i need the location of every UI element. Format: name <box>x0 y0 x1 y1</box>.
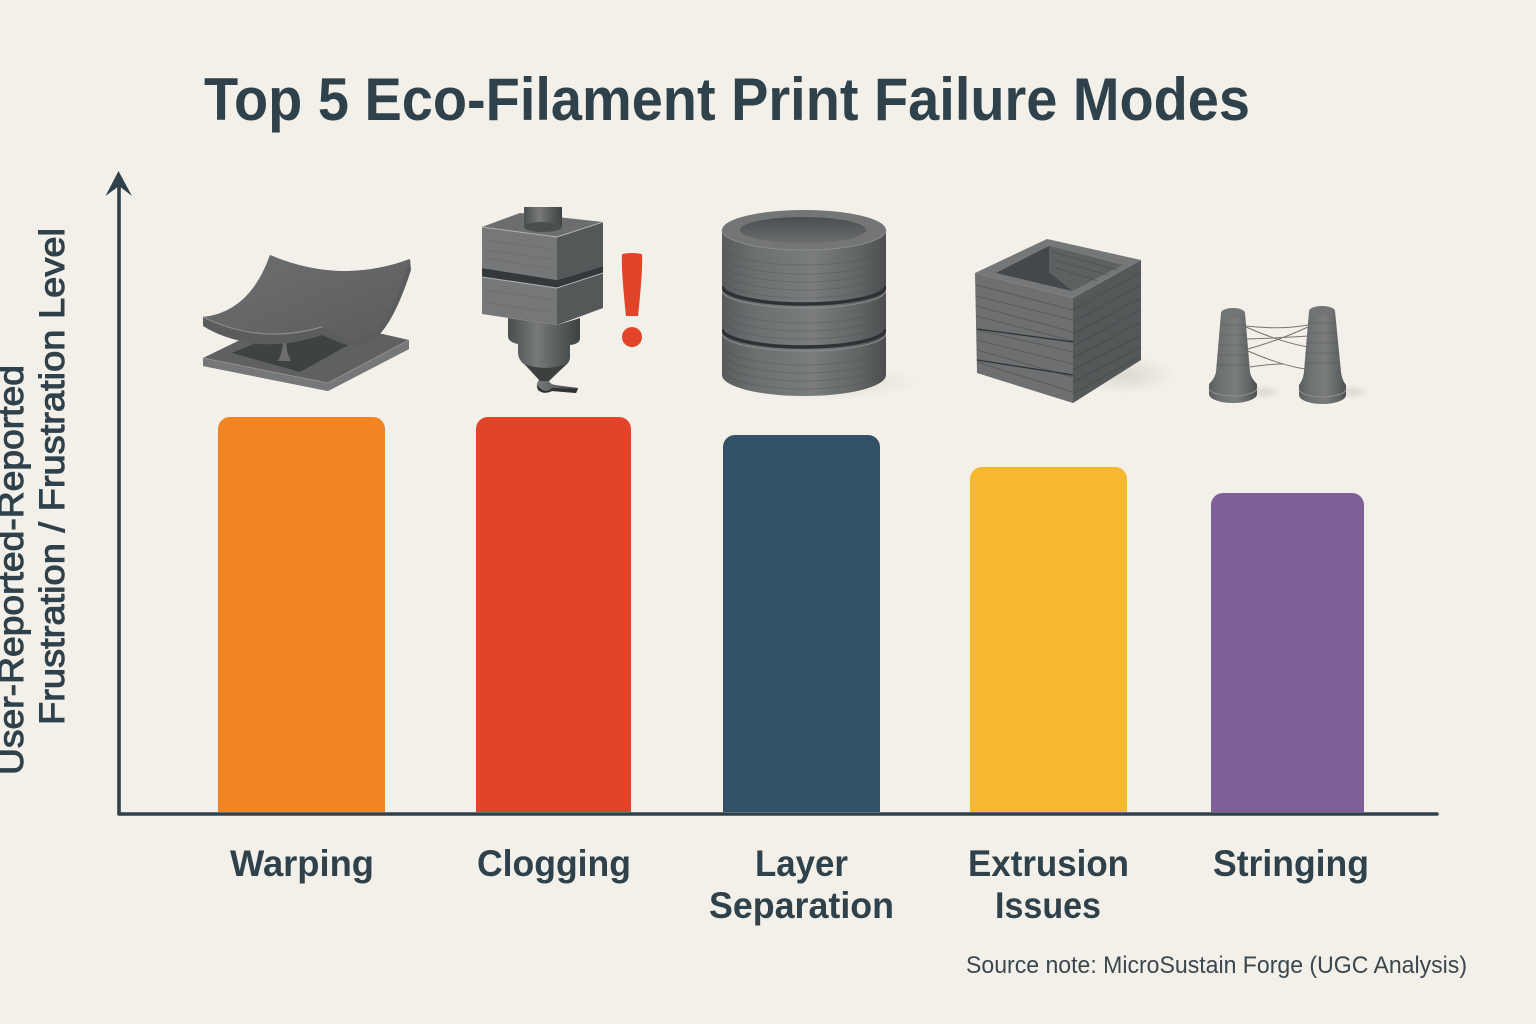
label: clogging: Clogging <box>477 843 631 884</box>
bar: layer separation <box>723 435 880 812</box>
bars <box>218 417 1364 812</box>
source note: Source note: MicroSustain Forge (UGC Analysis) <box>966 952 1467 979</box>
icon: rough square box <box>975 239 1175 403</box>
category labels <box>230 843 1369 926</box>
bar: warping <box>218 417 385 812</box>
icon: red exclamation mark <box>622 253 642 347</box>
bar: extrusion issues <box>970 467 1127 812</box>
y-axis label: Frustration / Frustration Level <box>33 228 72 725</box>
bar: stringing <box>1211 493 1364 812</box>
label: layer separation: Separation <box>709 885 894 926</box>
icon: separated ring layers <box>722 210 886 396</box>
axes with arrow <box>106 171 1437 814</box>
label: extrusion issues <box>968 843 1129 926</box>
label: layer separation <box>709 843 894 926</box>
y-axis label <box>0 228 72 775</box>
icon: warped sheet on plate <box>203 255 411 391</box>
bar: clogging <box>476 417 631 812</box>
icon: clogged nozzle <box>482 207 642 393</box>
icon: stringing posts <box>1209 306 1372 404</box>
label: extrusion issues: Issues <box>995 885 1101 926</box>
label: stringing: Stringing <box>1213 843 1369 884</box>
label: warping: Warping <box>230 843 374 884</box>
title: Top 5 Eco-Filament Print Failure Modes <box>204 66 1250 133</box>
label: extrusion issues: Extrusion <box>968 843 1129 884</box>
label: layer separation: Layer <box>755 843 848 884</box>
